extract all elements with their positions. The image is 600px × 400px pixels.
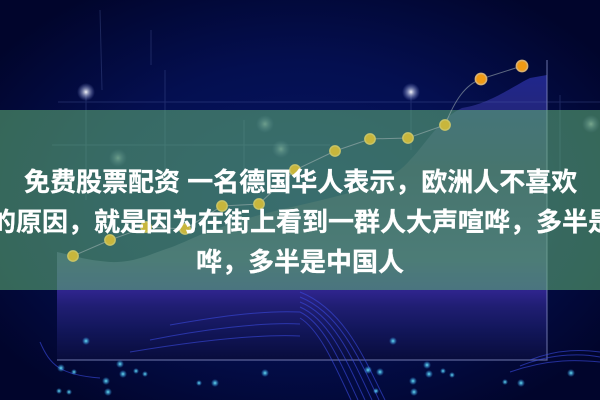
network dots [56, 337, 575, 396]
glowing nodes [77, 83, 600, 167]
translucent green band [0, 110, 600, 290]
chart panel [57, 60, 547, 360]
wave mesh [40, 292, 600, 400]
headline text [0, 167, 600, 277]
headline text: 免费股票配资 一名德国华人表示，欧洲人不喜欢 [24, 167, 577, 197]
headline text: 哗，多半是中国人 [196, 247, 404, 277]
grid lines [52, 10, 600, 200]
